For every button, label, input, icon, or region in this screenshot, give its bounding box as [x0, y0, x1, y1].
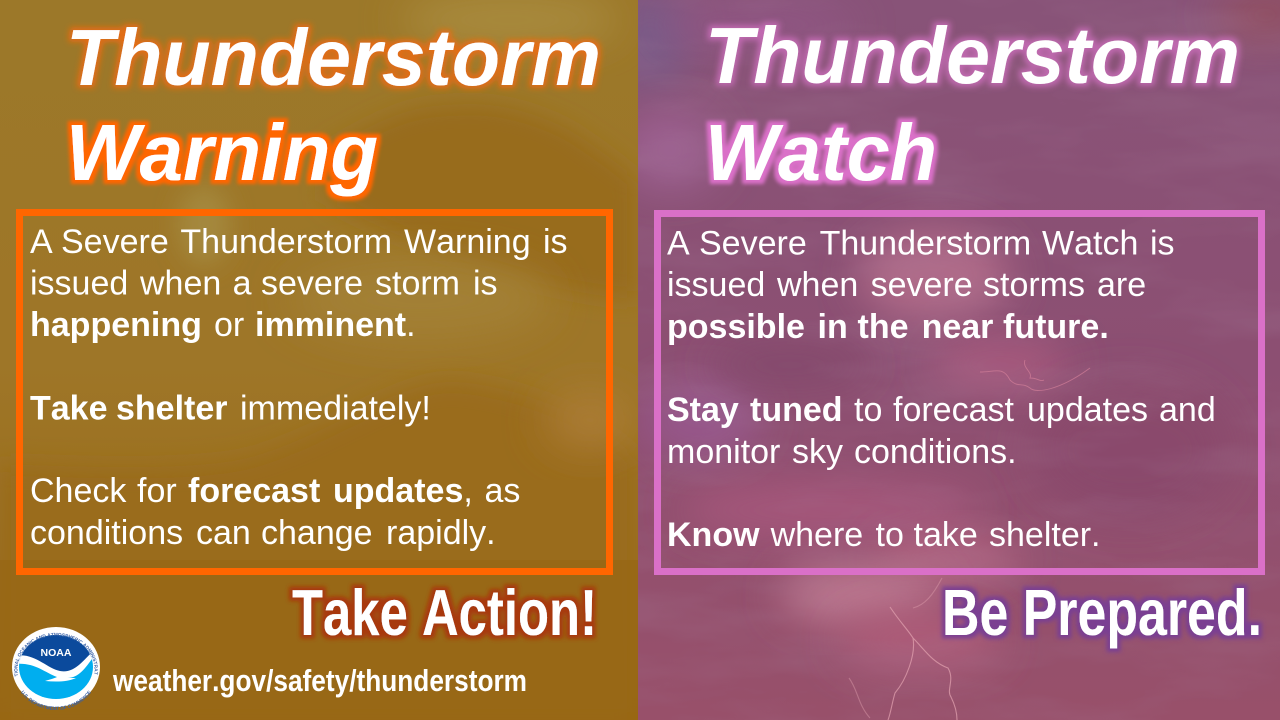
- text block: watch definition: possible: [667, 308, 805, 346]
- text block: watch definition: future.: [1003, 308, 1109, 346]
- heading line: Warning: Warning: [66, 108, 378, 197]
- panel: watch background: [610, 0, 1280, 720]
- text block: stay tuned: and: [1159, 391, 1216, 429]
- heading line: Thunderstorm (watch): Thunderstorm: [705, 11, 1240, 100]
- text block: watch definition: the: [858, 308, 908, 346]
- text block: take shelter: shelter: [116, 390, 228, 428]
- panel: warning text box: [20, 212, 610, 572]
- text block: forecast updates: can: [196, 514, 251, 552]
- text block: warning definition: happening: [30, 306, 202, 344]
- text block: warning definition: .: [406, 306, 416, 344]
- text block: watch definition: Watch: [1042, 224, 1138, 262]
- text block: stay tuned: Stay: [667, 391, 739, 429]
- text block: forecast updates: conditions: [30, 514, 183, 552]
- text block: warning definition: Thunderstorm: [180, 223, 392, 261]
- text block: stay tuned: sky: [792, 433, 843, 471]
- text block: forecast updates: as: [484, 472, 520, 510]
- text block: stay tuned: forecast: [893, 391, 1014, 429]
- title: Thunderstorm Watch: [705, 11, 1240, 197]
- icon: NOAA logo: U.S. DEPARTMENT OF COMMERCE: [21, 690, 91, 710]
- text block: stay tuned: tuned: [750, 391, 843, 429]
- text block: warning definition: or: [214, 306, 244, 344]
- text block: watch definition: are: [1097, 266, 1146, 304]
- text block: watch definition: near: [922, 308, 993, 346]
- text block: warning definition: A: [30, 223, 53, 261]
- text block: watch definition: issued: [667, 266, 765, 304]
- text block: watch definition: in: [818, 308, 848, 346]
- heading line: Thunderstorm (warning): Thunderstorm: [66, 13, 601, 102]
- panel: watch text box: [658, 214, 1262, 572]
- text block: stay tuned: conditions.: [854, 433, 1017, 471]
- text block: watch definition: Thunderstorm: [820, 224, 1031, 262]
- text block: know where to shelter: where: [770, 516, 863, 554]
- text block: know where to shelter: to: [876, 516, 904, 554]
- icon: NOAA logo: NOAA: [40, 647, 72, 659]
- title: Thunderstorm Warning: [66, 13, 601, 197]
- text block: forecast updates: rapidly.: [386, 514, 496, 552]
- text block: know where to shelter: take: [914, 516, 978, 554]
- text block: stay tuned: to: [854, 391, 882, 429]
- text block: warning definition: Warning: [404, 223, 531, 261]
- text block: warning definition: a: [233, 264, 252, 302]
- text block: know where to shelter: Know: [667, 516, 760, 554]
- callout: Take Action!: Take Action!: [292, 576, 597, 649]
- text block: warning definition: issued: [30, 264, 128, 302]
- text block: watch definition: Severe: [699, 224, 807, 262]
- text block: watch definition: severe: [871, 266, 973, 304]
- text block: forecast updates: change: [261, 514, 373, 552]
- text block: forecast updates: for: [137, 472, 177, 510]
- text block: watch definition: A: [667, 224, 690, 262]
- text block: watch definition: storms: [983, 266, 1085, 304]
- text block: take shelter: immediately!: [240, 390, 431, 428]
- text block: take shelter: Take: [30, 390, 108, 428]
- text block: forecast updates: Check: [30, 472, 127, 510]
- text block: forecast updates: ,: [463, 472, 473, 510]
- text block: forecast updates: forecast: [188, 472, 320, 510]
- text block: warning definition: is: [473, 264, 498, 302]
- text block: warning definition: storm: [375, 264, 460, 302]
- heading line: Watch: Watch: [705, 108, 937, 197]
- text block: warning definition: when: [139, 264, 221, 302]
- link: weather.gov safety URL: weather.gov/safety/thunderstorm: [112, 663, 527, 698]
- text block: warning definition: is: [543, 223, 568, 261]
- icon: lightning bolt upper: [980, 360, 1090, 391]
- panel: warning background: [0, 0, 638, 720]
- text block: stay tuned: monitor: [667, 433, 780, 471]
- text block: watch definition: is: [1150, 224, 1175, 262]
- text block: warning definition: severe: [261, 264, 363, 302]
- text block: watch definition: when: [776, 266, 858, 304]
- text block: warning definition: Severe: [61, 223, 169, 261]
- icon: lightning bolt lower: [849, 578, 957, 720]
- icon: NOAA logo: NATIONAL OCEANIC AND ATMOSPHERIC ADMINISTRATION: [14, 632, 98, 677]
- text block: stay tuned: updates: [1027, 391, 1148, 429]
- icon: NOAA logo: [12, 627, 100, 710]
- text block: know where to shelter: shelter.: [989, 516, 1100, 554]
- text block: forecast updates: updates: [333, 472, 463, 510]
- text block: warning definition: imminent: [255, 306, 406, 344]
